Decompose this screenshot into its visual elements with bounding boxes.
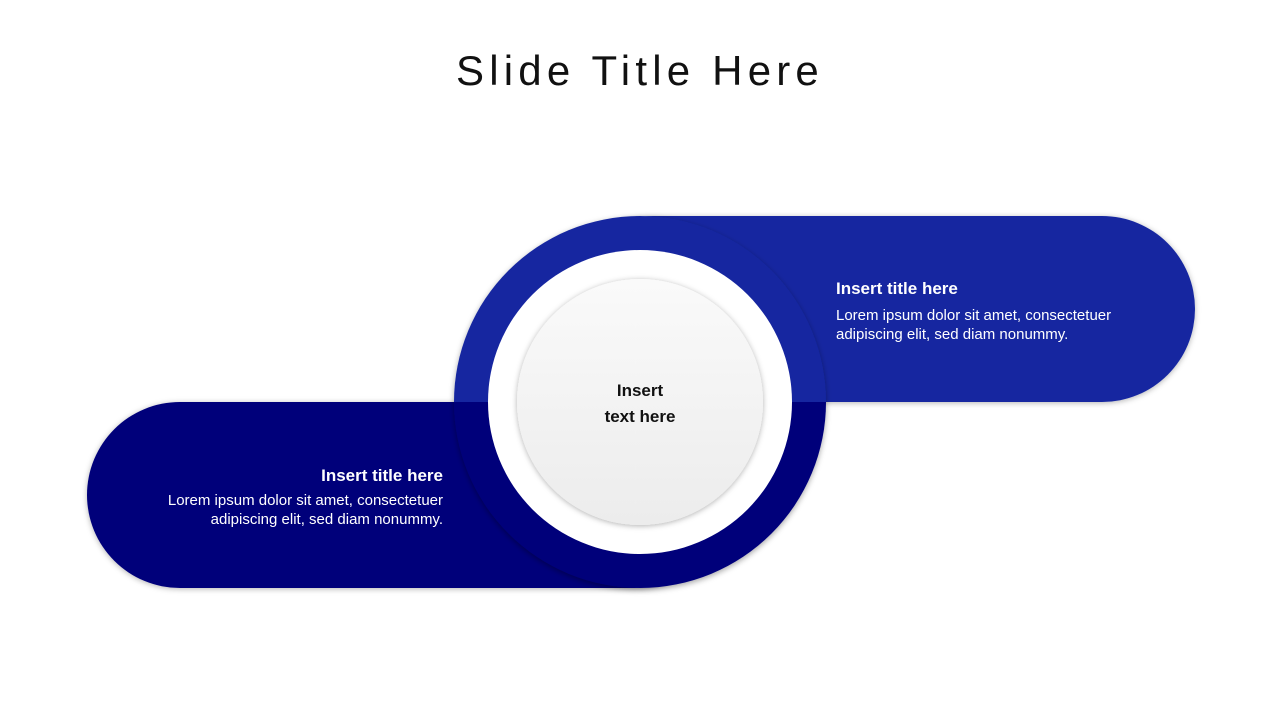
title: Slide Title Here xyxy=(456,47,824,94)
circle: outer ring xyxy=(454,216,826,588)
text: bottom title: Insert title here xyxy=(321,466,443,485)
circle: inner xyxy=(517,279,763,525)
text: bottom body: Lorem ipsum dolor sit amet, consectetuer xyxy=(168,492,443,509)
circle: white ring xyxy=(488,250,792,554)
text: center: Insert xyxy=(617,381,663,400)
panel: bottom bar xyxy=(87,402,727,588)
text: top title: Insert title here xyxy=(836,279,958,298)
text: center: text here xyxy=(605,407,675,426)
panel: top bar xyxy=(560,216,1195,402)
text: top body: Lorem ipsum dolor sit amet, consectetuer xyxy=(836,307,1111,324)
text: top body: adipiscing elit, sed diam nonummy. xyxy=(836,326,1068,343)
text: bottom body: adipiscing elit, sed diam nonummy. xyxy=(211,511,443,528)
